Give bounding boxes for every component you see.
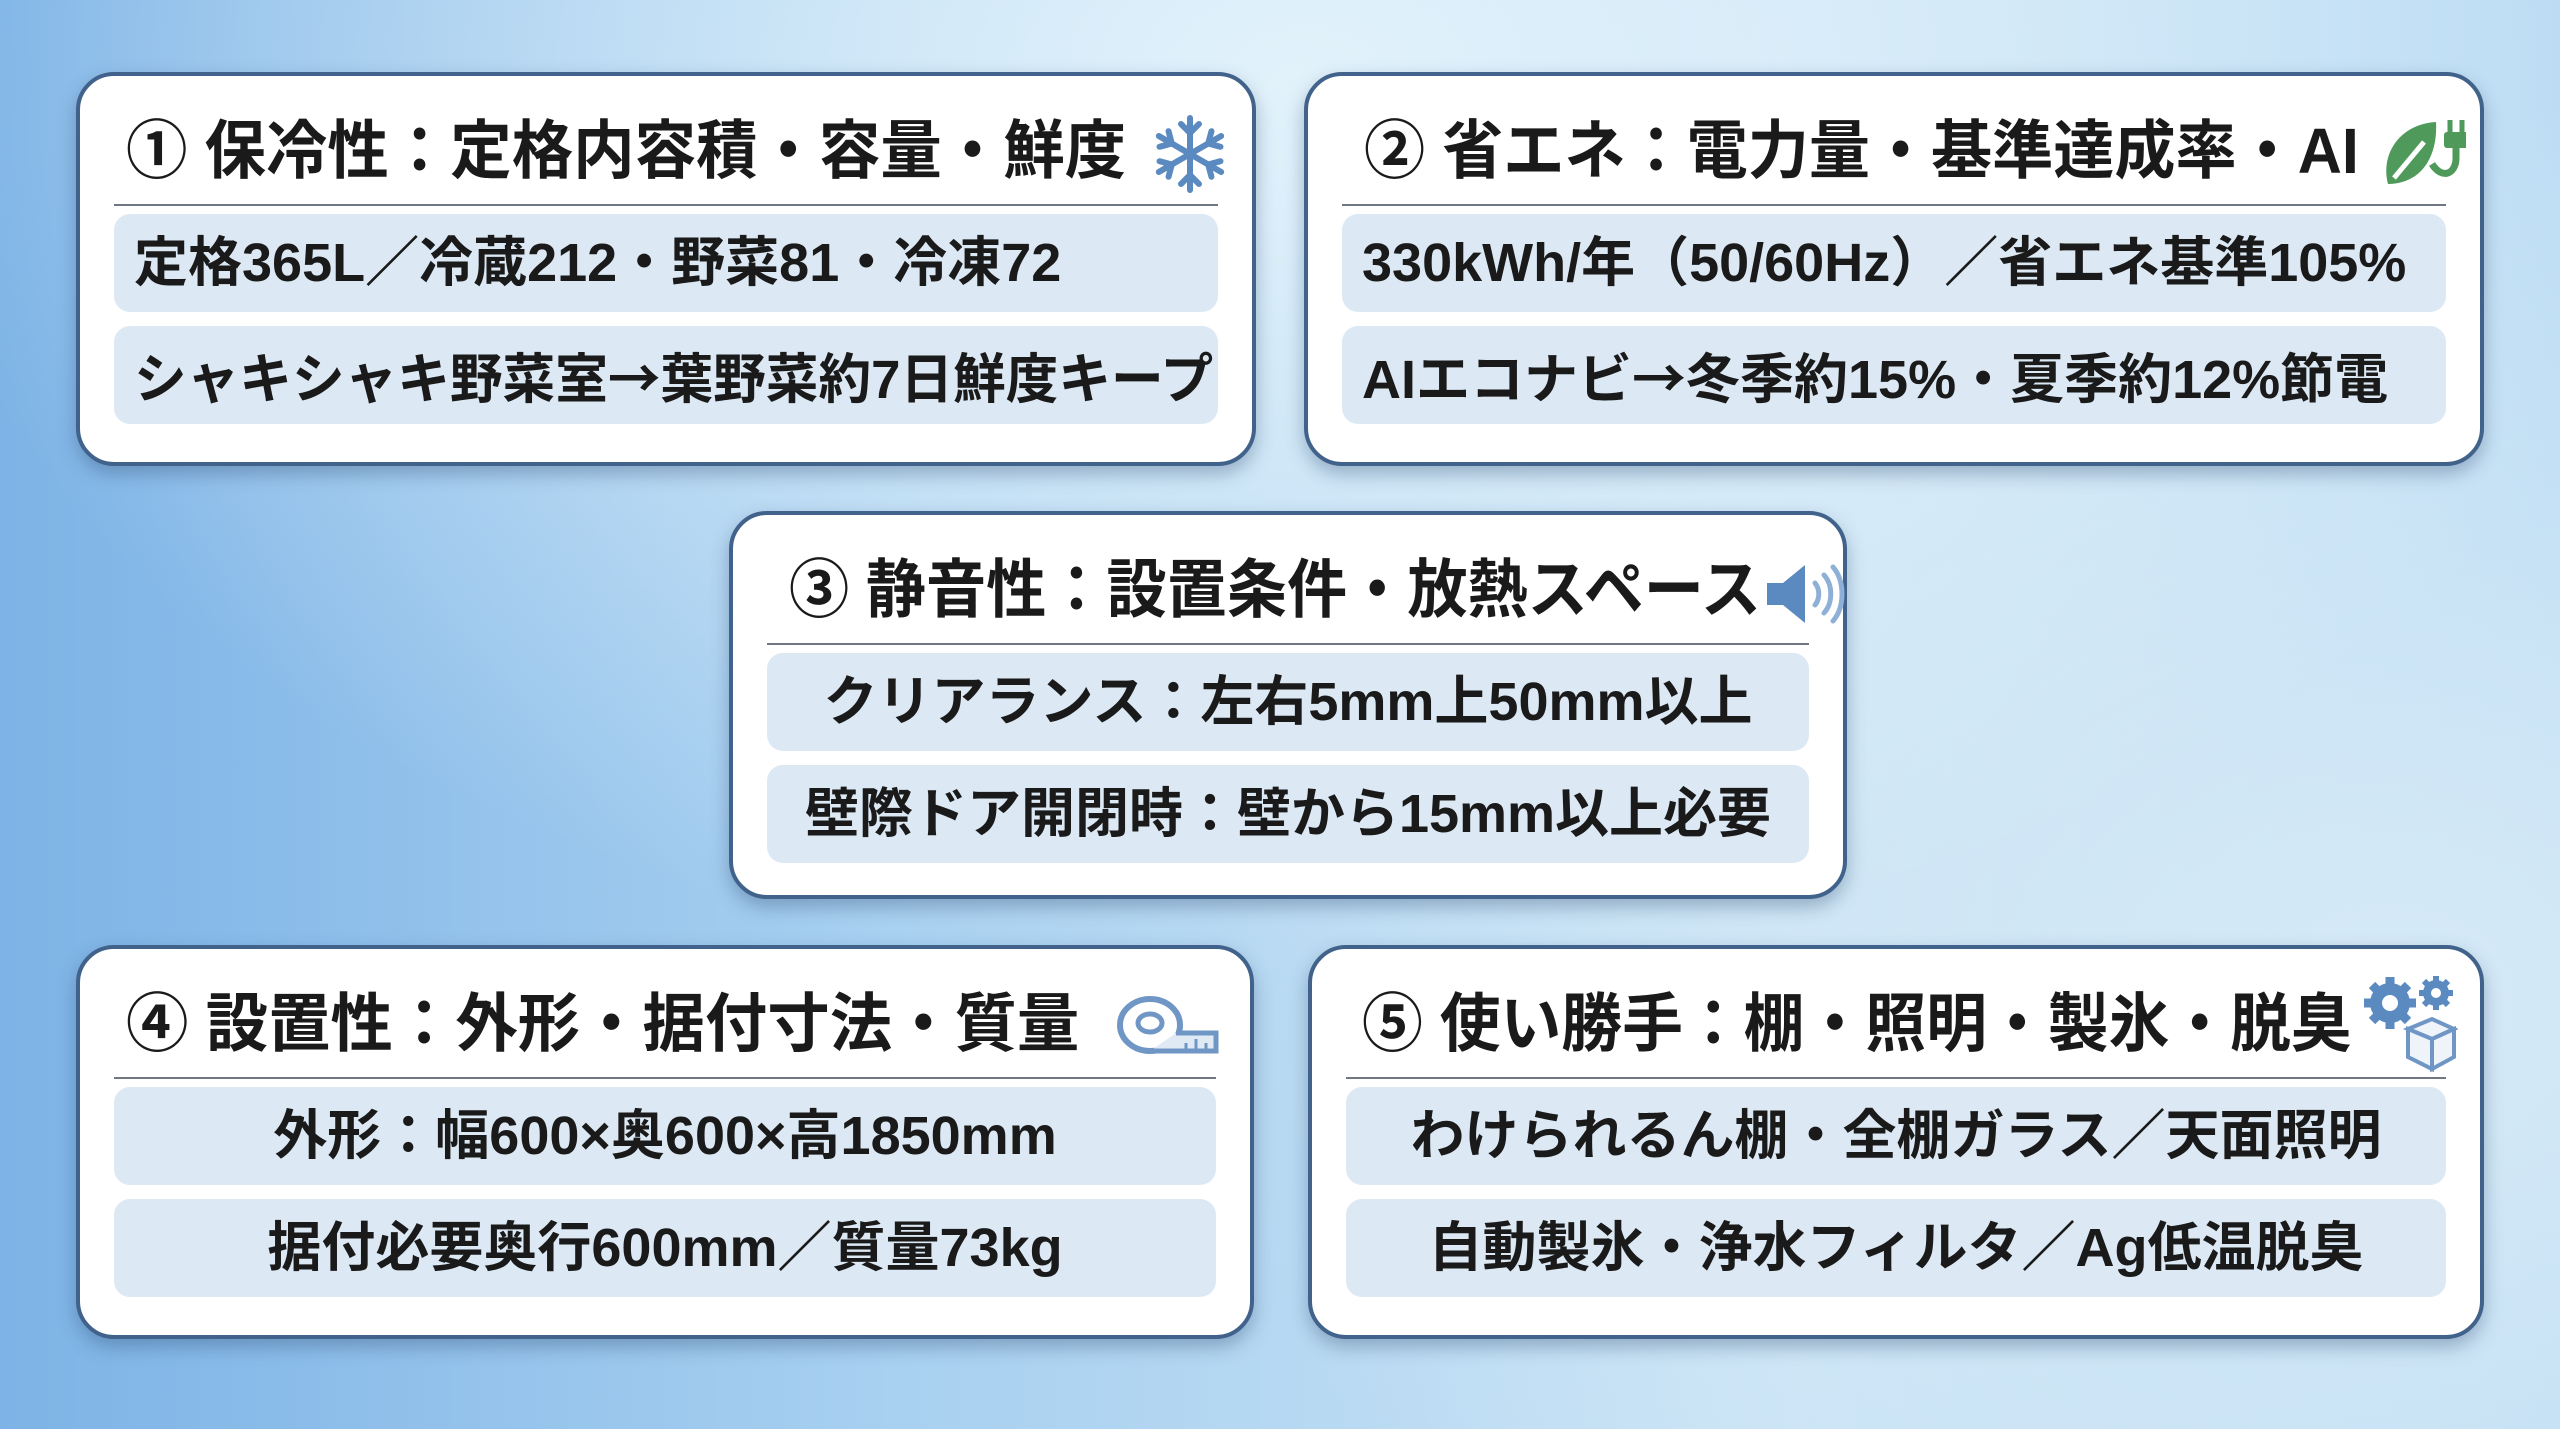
icon: tape measure	[1117, 996, 1218, 1054]
panel 2: energy	[1304, 72, 2484, 466]
row 5-2	[1346, 1199, 2446, 1297]
row 1-1: 定格365L／冷蔵212・野菜81・冷凍72	[134, 233, 1061, 293]
row 3-1	[767, 653, 1809, 751]
row 3-2: 壁際ドア開閉時：壁から15mm以上必要	[805, 784, 1771, 844]
heading 2: ② 省エネ：電力量・基準達成率・AI	[1364, 115, 2359, 187]
icon: gears and cube	[2364, 976, 2458, 1072]
panel 3: quietness	[729, 511, 1847, 899]
row 3-2	[767, 765, 1809, 863]
row 4-1: 外形：幅600×奥600×高1850mm	[273, 1106, 1057, 1166]
icon: snowflake	[1156, 115, 1224, 193]
row 5-2: 自動製氷・浄水フィルタ／Ag低温脱臭	[1429, 1218, 2363, 1278]
row 5-1: わけられるん棚・全棚ガラス／天面照明	[1411, 1106, 2381, 1166]
panel 1: cooling	[76, 72, 1256, 466]
row 2-2: AIエコナビ→冬季約15%・夏季約12%節電	[1362, 335, 2388, 414]
panel 5: usability	[1308, 945, 2484, 1339]
row 5-1	[1346, 1087, 2446, 1185]
heading 3: ③ 静音性：設置条件・放熱スペース	[789, 554, 1761, 626]
icon: leaf plug	[2386, 120, 2466, 184]
heading 1: ① 保冷性：定格内容積・容量・鮮度	[126, 115, 1126, 187]
row 4-1	[114, 1087, 1216, 1185]
row 4-2	[114, 1199, 1216, 1297]
row 1-2: シャキシャキ野菜室→葉野菜約7日鮮度キープ	[134, 335, 1213, 414]
row 3-1: クリアランス：左右5mm上50mm以上	[823, 672, 1753, 732]
icon: speaker	[1767, 564, 1844, 624]
heading 5: ⑤ 使い勝手：棚・照明・製氷・脱臭	[1362, 988, 2352, 1060]
row 1-1	[114, 214, 1218, 312]
row 4-2: 据付必要奥行600mm／質量73kg	[267, 1218, 1063, 1278]
row 2-1: 330kWh/年（50/60Hz）／省エネ基準105%	[1362, 233, 2406, 293]
heading 4: ④ 設置性：外形・据付寸法・質量	[126, 988, 1079, 1060]
panel 4: installation	[76, 945, 1254, 1339]
row 2-1	[1342, 214, 2446, 312]
